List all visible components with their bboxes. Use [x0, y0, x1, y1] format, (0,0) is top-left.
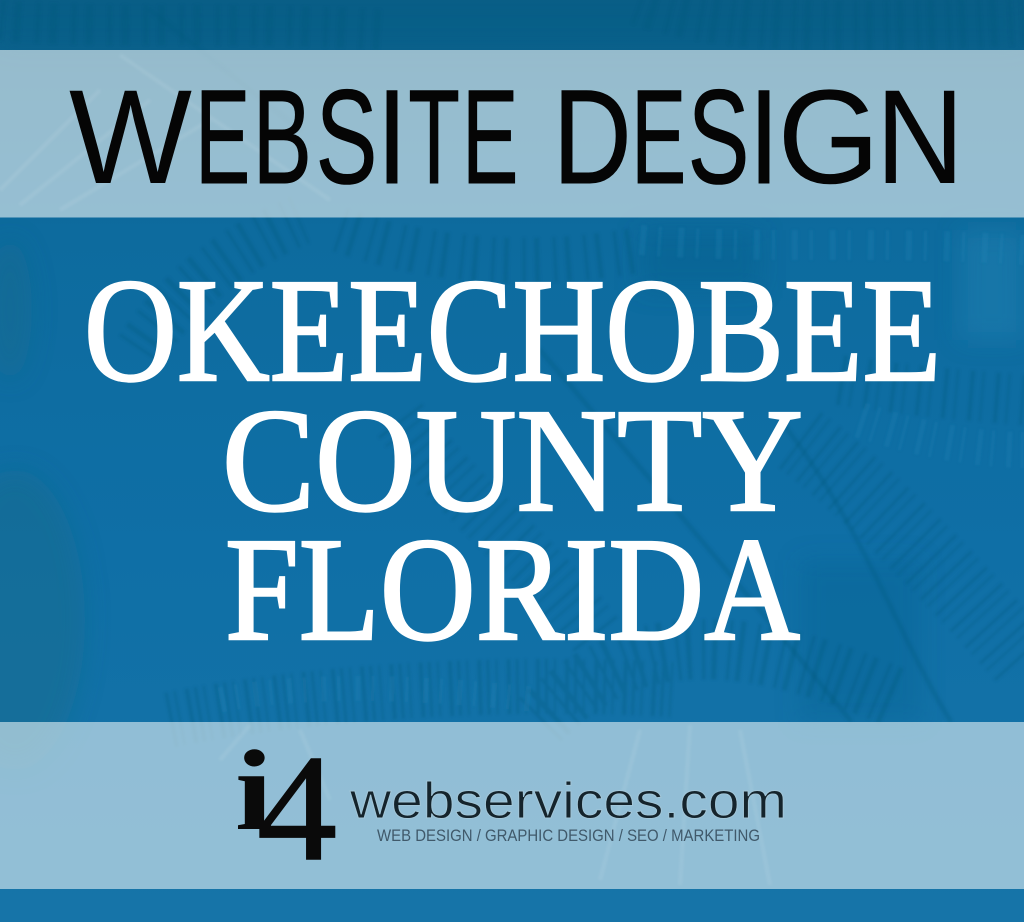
logo tagline: WEB DESIGN / GRAPHIC DESIGN / SEO / MARKETING [377, 827, 760, 845]
heading: website design: S [688, 63, 749, 212]
heading: website design: E [462, 63, 518, 212]
logo: i4 webservices.com [235, 724, 787, 892]
title line: florida: FLORIDA [225, 508, 800, 672]
heading: website design: D [553, 63, 632, 212]
heading: website design: E [195, 63, 250, 212]
logo mark: i4: i [235, 727, 273, 854]
heading: website design: G [777, 63, 880, 212]
logo mark: i4: 4 [257, 724, 337, 892]
heading: website design: I [749, 63, 779, 212]
heading: website design: E [631, 63, 686, 212]
top band [0, 50, 1024, 218]
heading: website design: I [377, 63, 407, 212]
heading: website design: B [253, 63, 312, 212]
title: location [84, 249, 941, 672]
title line: county: COUNTY [222, 379, 803, 543]
heading: website design: W [69, 63, 193, 212]
heading: website design: S [316, 63, 377, 212]
bottom band [0, 722, 1024, 889]
heading: website design: N [876, 63, 964, 212]
heading: website design: T [408, 63, 460, 212]
logo wordmark: webservices.com [349, 772, 787, 829]
faint fronds on bands [0, 55, 770, 885]
